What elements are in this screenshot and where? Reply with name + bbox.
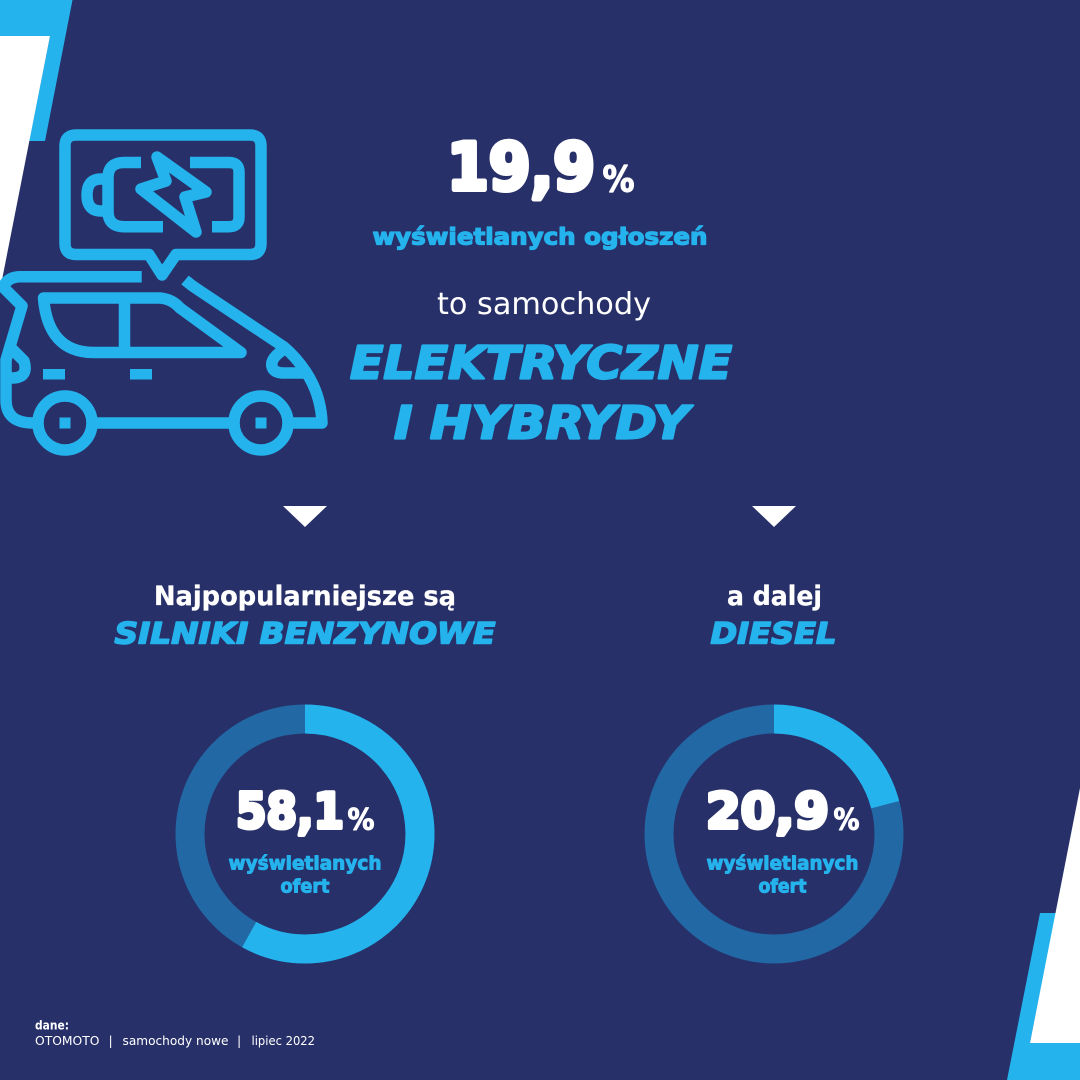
label: wyświetlanych ofert: ofert: [758, 876, 806, 898]
icon: battery: [87, 162, 239, 227]
source note: lipiec 2022: [252, 1033, 315, 1048]
icon: car body: [3, 277, 322, 423]
icon: speech bubble: [65, 135, 261, 275]
source note: |: [237, 1033, 241, 1048]
source note: samochody nowe: [122, 1033, 229, 1048]
text: to samochody: to samochody: [437, 287, 651, 322]
heading: Najpopularniejsze są SILNIKI BENZYNOWE: SILNIKI BENZYNOWE: [114, 616, 496, 650]
heading: a dalej DIESEL: DIESEL: [710, 616, 836, 650]
label: wyświetlanych ofert: ofert: [280, 876, 330, 898]
heading: a dalej DIESEL: a dalej: [727, 581, 822, 612]
label: wyświetlanych ofert: wyświetlanych: [706, 852, 858, 874]
heading: a dalej DIESEL: [710, 581, 836, 650]
label: wyświetlanych ofert: [228, 852, 382, 898]
value: 20,9%: %: [834, 802, 860, 836]
heading: ELEKTRYCZNE I HYBRYDY: [350, 336, 732, 449]
source note: [35, 1018, 315, 1048]
arrow: right down triangle: [752, 506, 796, 527]
source note: OTOMOTO: [35, 1033, 100, 1048]
label: wyświetlanych ofert: wyświetlanych: [228, 852, 382, 874]
icon: electric car with battery speech bubble: [3, 135, 322, 450]
donut chart: 58,1%: [190, 719, 420, 949]
headline statistic: 19,9%: 19,9: [447, 130, 595, 206]
headline statistic: 19,9%: %: [602, 160, 634, 200]
source note: |: [108, 1033, 113, 1048]
source note: dane:: [35, 1018, 69, 1032]
label: wyświetlanych ofert: [706, 852, 858, 898]
donut chart: 20,9%: [659, 719, 889, 949]
decoration: top-left blue and white slanted shape: [0, 0, 72, 285]
icon: car wheels: [38, 396, 92, 450]
heading: Najpopularniejsze są SILNIKI BENZYNOWE: Najpopularniejsze są: [154, 581, 456, 612]
decoration: bottom-right blue and white slanted shape: [1007, 788, 1080, 1080]
value: 20,9%: 20,9: [706, 783, 829, 840]
heading: ELEKTRYCZNE I HYBRYDY: I HYBRYDY: [394, 396, 694, 449]
value: 58,1%: %: [348, 802, 374, 836]
icon: wheel hubs and door handles: [43, 369, 266, 428]
arrow: left down triangle: [283, 506, 327, 527]
subheading: wyświetlanych ogłoszeń: wyświetlanych ogłoszeń: [372, 224, 708, 250]
icon: lightning bolt: [141, 157, 206, 232]
heading: Najpopularniejsze są SILNIKI BENZYNOWE: [114, 581, 496, 650]
heading: ELEKTRYCZNE I HYBRYDY: ELEKTRYCZNE: [350, 336, 732, 389]
value: 58,1%: 58,1: [236, 783, 344, 840]
icon: car lamps: [5, 349, 307, 378]
icon: car windows: [44, 298, 241, 352]
